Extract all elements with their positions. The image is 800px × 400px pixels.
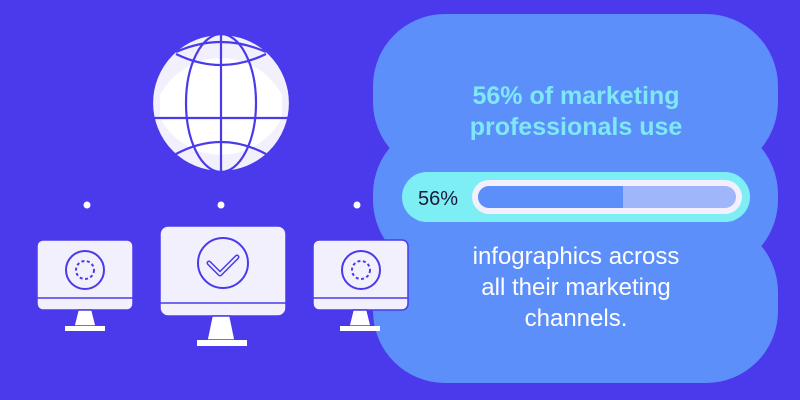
text: all their marketing [481,274,671,301]
icon: left monitor [37,240,133,331]
icon: globe [152,34,290,172]
heading: 56% of marketing [472,82,680,110]
body text: infographics across [473,243,679,270]
dots [84,202,360,208]
progress bar [402,172,750,222]
panel: cloud background [373,14,778,383]
text: professionals use [470,113,682,141]
progress bar: 56% [418,188,458,210]
icon: center monitor with check [160,226,286,346]
icon: right monitor [313,240,408,331]
text: channels. [525,305,627,332]
